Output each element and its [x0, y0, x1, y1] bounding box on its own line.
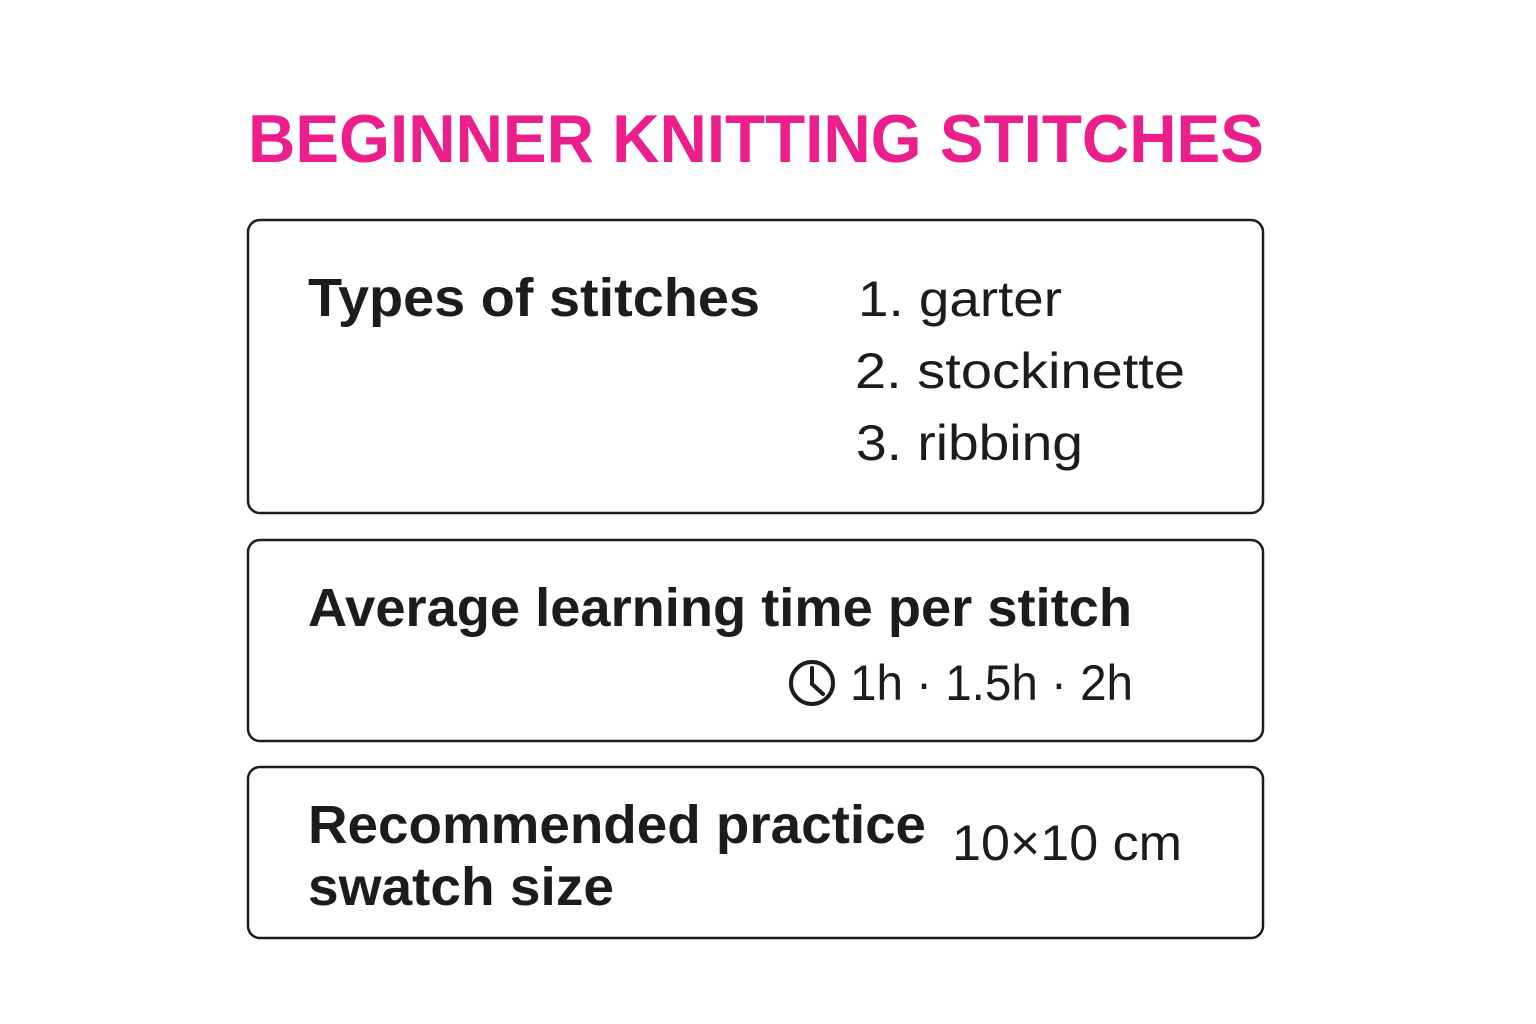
panel: swatch size [248, 767, 1263, 938]
text: swatch size value: 10×10 cm [952, 815, 1182, 871]
list: stitch names: 2. stockinette [855, 343, 1185, 399]
list: stitch names [855, 271, 1185, 471]
heading: types of stitches: Types of stitches [308, 268, 760, 328]
heading: recommended swatch: Recommended practice [308, 795, 926, 855]
heading: average learning time: Average learning time per stitch [308, 578, 1132, 638]
panel: learning time [248, 540, 1263, 741]
title: BEGINNER KNITTING STITCHES [248, 101, 1264, 177]
panel: types of stitches [248, 220, 1263, 513]
icon: clock [791, 662, 833, 704]
text: times: 1h · 1.5h · 2h [850, 655, 1133, 711]
list: stitch names: 1. garter [858, 271, 1062, 327]
list: stitch names: 3. ribbing [856, 415, 1083, 471]
heading: recommended swatch: swatch size [308, 857, 614, 917]
heading: recommended swatch [308, 795, 926, 917]
